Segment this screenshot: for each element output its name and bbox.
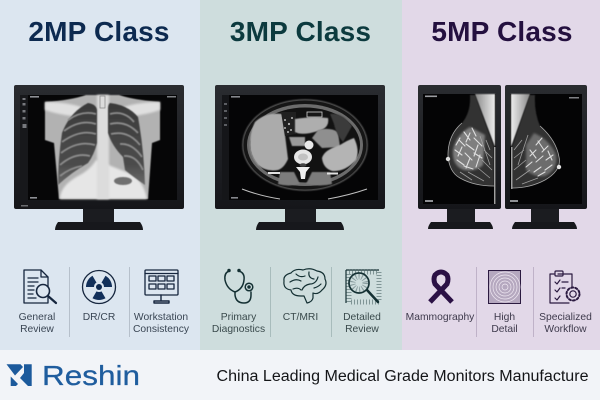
label: Detailed Review: Review	[345, 324, 379, 335]
monitor: right mammogram	[505, 85, 587, 229]
icon: stethoscope	[225, 270, 253, 303]
label: General Review: Review	[20, 324, 54, 335]
panel: 2MP class	[0, 0, 200, 350]
icon: fingerprint detail	[488, 270, 520, 304]
icon: workstation display	[145, 270, 178, 303]
label: Primary Diagnostics: Primary	[221, 312, 257, 323]
left mammogram image	[446, 94, 496, 204]
heading: 3MP Class: 3MP Class	[230, 16, 371, 47]
label: DR/CR: DR/CR	[83, 312, 115, 323]
panel: 5MP class	[402, 0, 600, 350]
heading: 2MP Class: 2MP Class	[28, 16, 170, 47]
logo: Reshin	[6, 360, 140, 391]
label: Mammography: Mammography	[406, 312, 475, 323]
icon: brain	[284, 269, 326, 303]
monitor: left mammogram	[418, 85, 501, 229]
label: Specialized Workflow: Specialized	[539, 312, 592, 323]
icon: radiation symbol	[82, 270, 116, 304]
monitor: abdominal CT	[215, 85, 385, 230]
tagline: China Leading Medical Grade Monitors Manufacture	[216, 368, 588, 385]
label: High Detail: Detail	[491, 324, 518, 335]
logo mark	[6, 364, 32, 386]
icon: awareness ribbon	[430, 272, 452, 302]
label: Specialized Workflow: Workflow	[544, 324, 587, 335]
icon: clipboard with gear	[550, 271, 580, 303]
label: General Review: General	[19, 312, 55, 323]
label: Workstation Consistency: Consistency	[133, 324, 190, 335]
icon: detailed review magnifier	[346, 270, 379, 303]
logo wordmark: Reshin	[42, 360, 140, 391]
heading: 5MP Class: 5MP Class	[431, 16, 573, 47]
label: High Detail: High	[494, 312, 515, 323]
label: Workstation Consistency: Workstation	[134, 312, 188, 323]
label: Detailed Review: Detailed	[343, 312, 381, 323]
icon: document with magnifier	[24, 270, 56, 303]
right mammogram image	[511, 94, 561, 189]
monitor: chest X-ray	[14, 85, 184, 230]
chest X-ray image	[45, 95, 160, 199]
panel: 3MP class	[200, 0, 402, 350]
abdominal CT image	[242, 99, 368, 199]
label: Primary Diagnostics: Diagnostics	[212, 324, 265, 335]
label: CT/MRI: CT/MRI	[283, 312, 318, 323]
footer band	[0, 350, 600, 400]
